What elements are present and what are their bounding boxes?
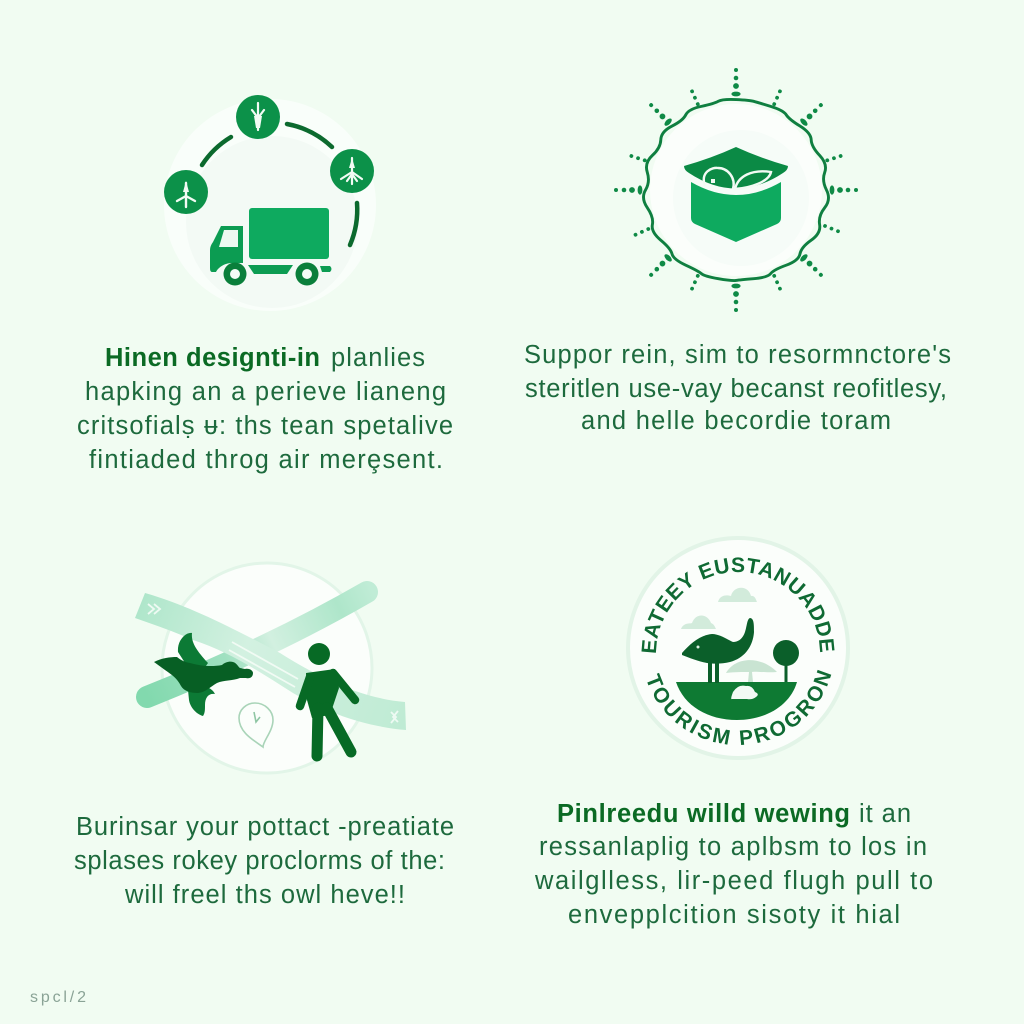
icon: location pin xyxy=(239,703,273,747)
sun rays xyxy=(614,68,858,312)
box body xyxy=(691,182,781,242)
text block: top right: Suppor rein, sim to resormnctore's xyxy=(524,341,951,369)
round tree xyxy=(773,640,799,682)
text block: top right: and helle becordie toram xyxy=(581,407,891,435)
clouds xyxy=(681,588,757,629)
text block: top left: hapking an a perieve lianeng xyxy=(85,378,446,406)
icon: person xyxy=(300,643,355,756)
box lid xyxy=(684,147,788,188)
light tree xyxy=(726,660,777,682)
text block: bottom right: ressanlaplig to aplbsm to los in xyxy=(539,833,927,861)
band: rising xyxy=(147,592,367,697)
text block: top left xyxy=(77,344,453,474)
emu bird xyxy=(682,618,754,683)
ground hill xyxy=(676,682,797,720)
icon: plane xyxy=(154,633,253,716)
text block: bottom left: will freel ths owl heve!! xyxy=(124,881,405,909)
icon: right crop badge xyxy=(330,149,374,193)
icon: traveller and plane with crossed bands xyxy=(135,563,406,773)
cycle arcs xyxy=(202,124,357,245)
icon: truck xyxy=(210,208,332,286)
icon: food box in scalloped sun ring xyxy=(614,68,858,312)
text block: bottom right: wailglless, lir-peed flugh pull to xyxy=(534,867,933,895)
footer page mark: spcl/2 xyxy=(30,989,86,1006)
band arrows xyxy=(148,604,398,723)
scalloped ring xyxy=(644,99,828,281)
car silhouette xyxy=(731,686,758,699)
text block: bottom right: Pinlreedu willd wewing xyxy=(557,800,850,828)
badge title arc: EATEEY EUSTANUADDE xyxy=(642,557,834,653)
text block: bottom left: Burinsar your pottact -preatiate xyxy=(76,813,454,841)
band: falling xyxy=(135,593,406,730)
text block: bottom left xyxy=(74,813,454,909)
text block: top right: steritlen use-vay becanst reofitlesy, xyxy=(525,375,947,403)
icon: top crop badge xyxy=(236,95,280,139)
text block: bottom right: envepplcition sisoty it hial xyxy=(568,901,900,929)
text block: top left: planlies xyxy=(331,344,425,372)
icon: delivery truck with crop cycle xyxy=(164,95,376,311)
icon: left crop badge xyxy=(164,170,208,214)
text block: bottom right xyxy=(534,800,933,929)
text block: top right xyxy=(524,341,951,435)
text block: top left: fintiaded throg air merȩsent. xyxy=(89,446,443,474)
text block: top left: critsofialṣ ᵾ: ths tean spetalive xyxy=(77,412,453,440)
text block: bottom right: it an xyxy=(859,800,911,828)
text block: top left: Hinen designti-in xyxy=(105,344,320,372)
box contents xyxy=(704,168,771,189)
badge: sustainable tourism program xyxy=(626,536,850,760)
badge subtitle arc: TOURISM PROGRON xyxy=(647,670,832,745)
text block: bottom left: splases rokey proclorms of the: xyxy=(74,847,445,875)
